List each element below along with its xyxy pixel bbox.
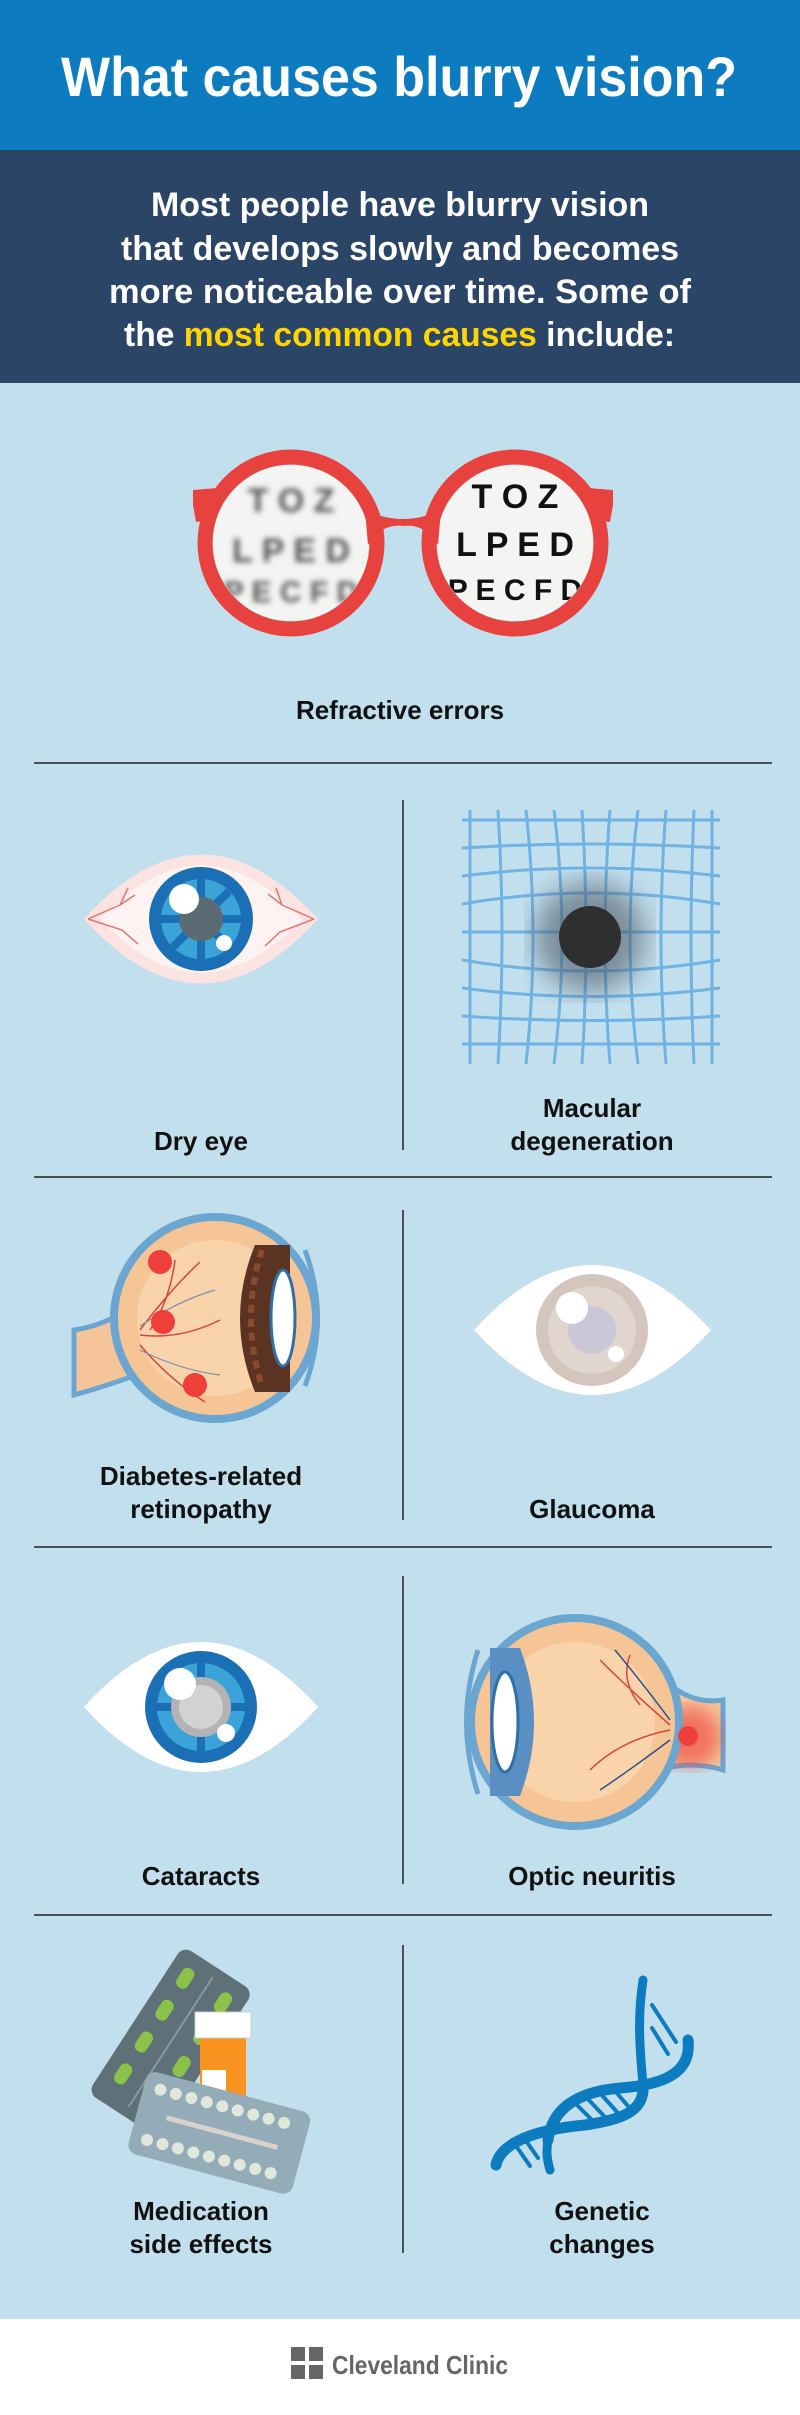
label: macular degeneration: degeneration — [510, 1126, 674, 1156]
icon: glasses: L P E D — [232, 532, 350, 570]
label: glaucoma: Glaucoma — [529, 1494, 655, 1524]
intro text — [109, 186, 692, 354]
label: refractive errors: Refractive errors — [296, 695, 504, 725]
intro panel — [0, 150, 800, 383]
intro text: Most people have blurry vision — [151, 186, 649, 224]
panel: cataracts — [84, 1642, 318, 1891]
icon: glasses: T O Z — [472, 478, 558, 516]
icon: glasses — [193, 450, 613, 636]
panel: refractive errors — [193, 457, 613, 725]
icon: glasses: P E C F D — [448, 574, 582, 607]
icon: retinopathy eyeball — [74, 1213, 320, 1423]
panel: diabetes-related retinopathy — [74, 1213, 320, 1524]
icon: glasses: D E F C Z — [462, 639, 568, 666]
label: medication side effects: side effects — [129, 2229, 273, 2259]
logo: Cleveland Clinic: Cleveland Clinic — [332, 2350, 508, 2380]
panel: macular degeneration — [462, 810, 720, 1156]
icon: DNA helix — [496, 1980, 688, 2170]
label: medication side effects: Medication — [133, 2196, 269, 2226]
icon: glasses: L P E D — [456, 526, 574, 564]
intro text: the most common causes include: — [124, 316, 675, 354]
label: dry eye: Dry eye — [154, 1126, 248, 1156]
icon: distorted grid — [462, 810, 720, 1064]
label: genetic changes: changes — [549, 2229, 655, 2259]
icon: dry eye — [84, 854, 318, 984]
icon: glasses: P E C F D — [224, 576, 358, 609]
icon: glaucoma eye — [474, 1265, 711, 1395]
icon: cataract eye — [84, 1642, 318, 1772]
header band — [0, 0, 800, 150]
panel: optic neuritis — [466, 1614, 723, 1891]
label: diabetes-related retinopathy: retinopathy — [130, 1494, 272, 1524]
panel: genetic changes — [496, 1980, 688, 2259]
panel: dry eye — [84, 854, 318, 1156]
icon: medications — [88, 1946, 312, 2196]
label: genetic changes: Genetic — [554, 2196, 650, 2226]
label: macular degeneration: Macular — [543, 1093, 641, 1123]
panel: medication side effects — [88, 1946, 312, 2259]
title: What causes blurry vision? — [61, 45, 737, 108]
label: optic neuritis: Optic neuritis — [508, 1861, 676, 1891]
intro text: more noticeable over time. Some of — [109, 273, 692, 311]
panel: glaucoma — [474, 1265, 711, 1524]
icon: glasses: T O Z — [248, 482, 334, 520]
logo: Cleveland Clinic — [291, 2347, 508, 2380]
label: cataracts: Cataracts — [142, 1861, 260, 1891]
icon: glasses: D E F C Z — [238, 636, 344, 663]
label: diabetes-related retinopathy: Diabetes-related — [100, 1461, 302, 1491]
intro text: that develops slowly and becomes — [121, 230, 679, 268]
icon: optic neuritis eyeball — [466, 1614, 723, 1830]
